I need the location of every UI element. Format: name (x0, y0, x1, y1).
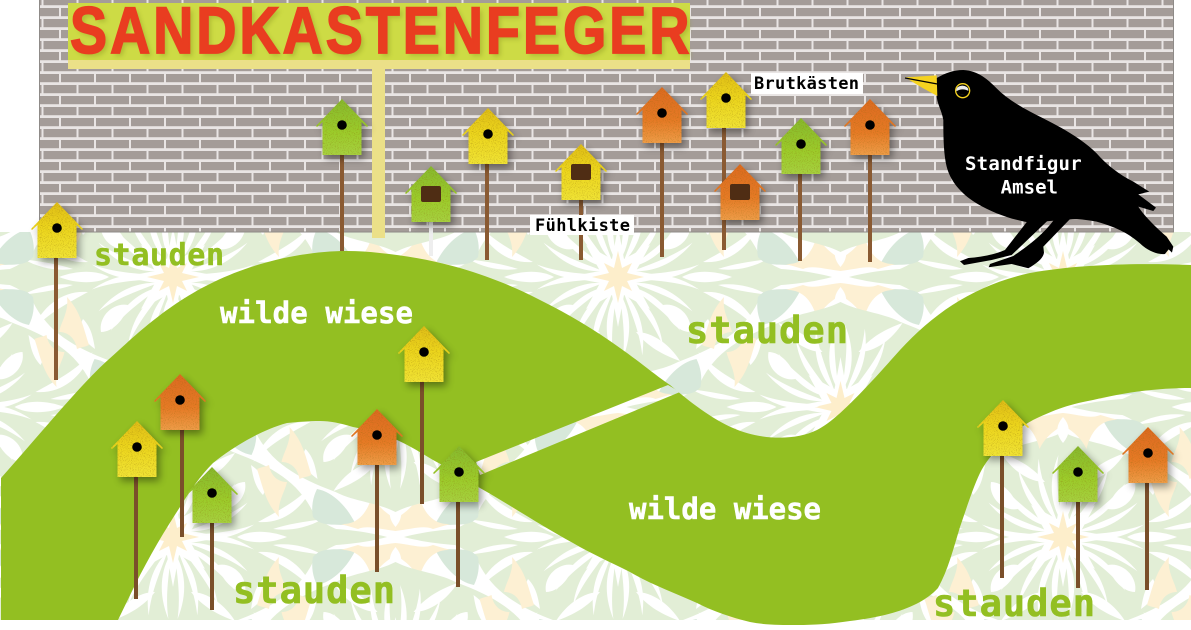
birdhouse: orange far right (1122, 427, 1174, 590)
label: stauden top left: stauden (94, 238, 224, 273)
figure: blackbird (905, 70, 1173, 268)
label: stauden bottom left: stauden (233, 569, 395, 612)
label: Standfigur Amsel (965, 153, 1082, 199)
label: wilde wiese top: wilde wiese (220, 296, 413, 330)
label: stauden bottom right: stauden (933, 582, 1095, 625)
label: wilde wiese bottom: wilde wiese (629, 492, 821, 526)
label: Standfigur Amsel: Standfigur (965, 153, 1082, 175)
birdhouse: orange centre (351, 409, 403, 572)
patterned ground (0, 232, 1191, 620)
label: Standfigur Amsel: Amsel (1001, 177, 1058, 199)
label: Brutkästen: Brutkästen (754, 74, 859, 94)
green meadow band (1, 251, 1191, 625)
label: Fühlkiste: Fühlkiste (535, 216, 630, 236)
birdhouse: green (775, 118, 827, 261)
birdhouse: orange (636, 87, 688, 257)
birdhouse: green on wall (316, 99, 368, 251)
birdhouse: orange right (844, 99, 896, 262)
birdhouse: yellow centre (398, 326, 450, 504)
birdhouse: yellow meadow (111, 421, 163, 599)
birdhouse: green meadow (186, 467, 238, 610)
sign: title (68, 0, 696, 238)
birdhouse: orange meadow (154, 374, 206, 537)
feel box: yellow (555, 144, 607, 260)
label: stauden centre: stauden (686, 309, 848, 352)
path across meadow (476, 385, 680, 475)
birdhouse: green right (1052, 446, 1104, 588)
birdhouse: green centre (433, 446, 485, 587)
birdhouse: yellow (462, 108, 514, 260)
birdhouse: yellow high (700, 72, 752, 250)
feel box: green (405, 166, 457, 256)
birdhouse: yellow right (977, 400, 1029, 578)
brick wall (40, 0, 1174, 232)
birdhouse: yellow left edge (31, 202, 83, 380)
feel box: orange (714, 164, 766, 220)
